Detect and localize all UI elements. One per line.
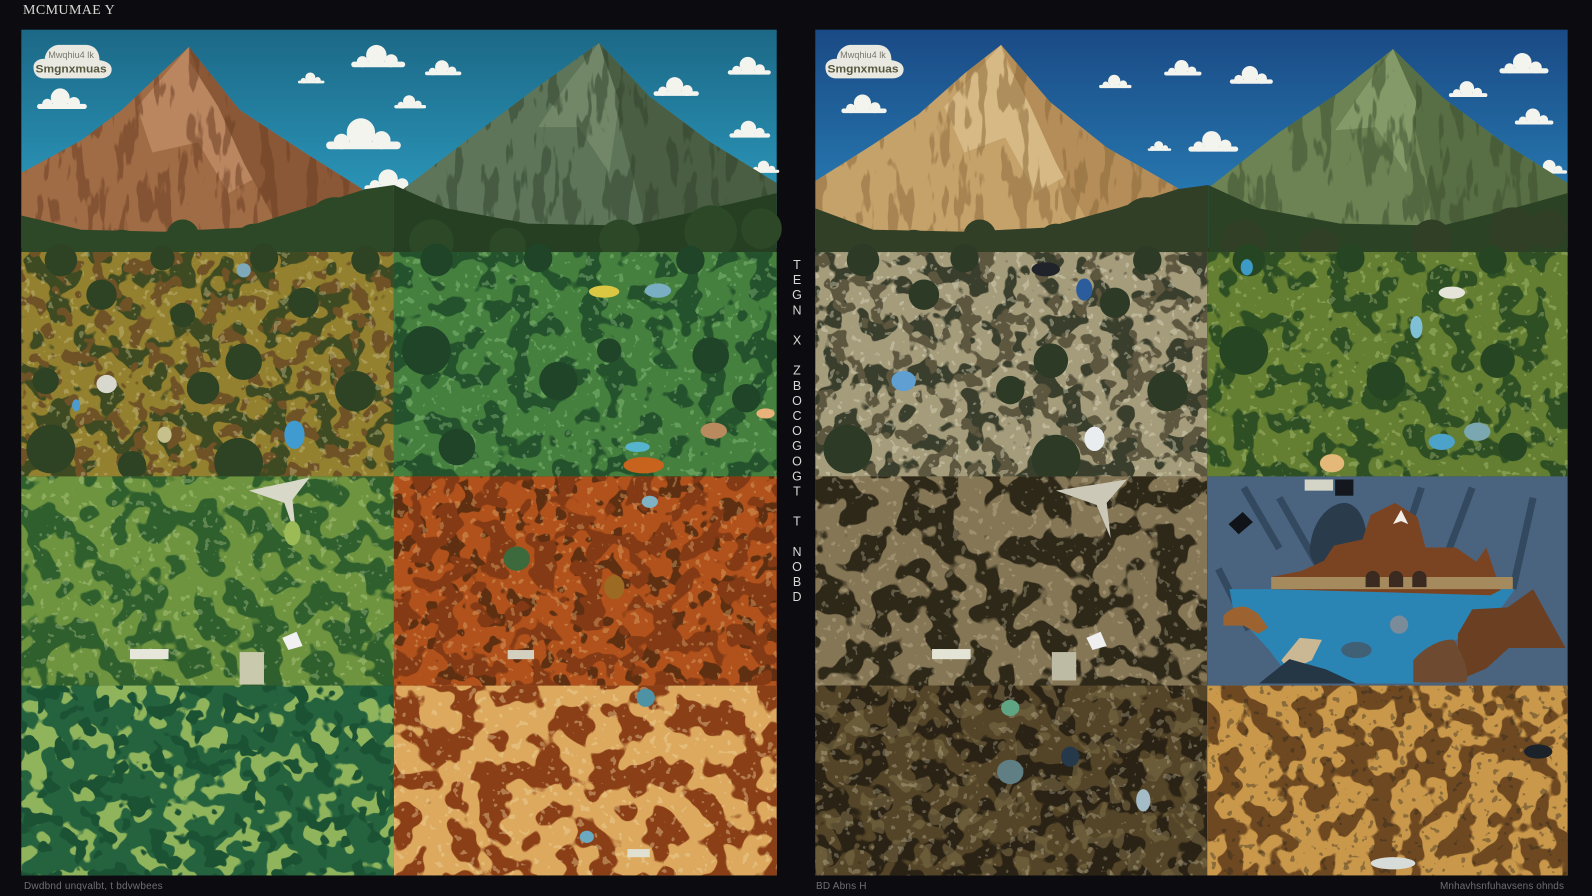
badge: left cloud label: Smgnxmuas <box>36 63 107 75</box>
soil layer: dark umber <box>815 476 1207 686</box>
footer note: left: Dwdbnd unqvalbt, t bdvwbees <box>24 881 163 892</box>
sky: right panel <box>815 30 1568 248</box>
debris: left panel <box>72 263 775 857</box>
scene: flooded ruins <box>1207 476 1568 686</box>
mountain: green peak <box>403 43 777 226</box>
mountain: brown peak <box>21 41 367 239</box>
soil layer: olive field <box>21 244 394 487</box>
clouds: left panel <box>37 45 779 191</box>
panel: left comparison <box>21 30 782 875</box>
footer note: middle: BD Abns H <box>816 881 867 892</box>
footer note: right: Mnhavhsnfuhavsens ohnds <box>1440 881 1564 892</box>
title: MCMUMAE Y <box>23 3 115 18</box>
vertical caption: TEGN X ZBOCOGOGT T NOBD <box>790 258 804 605</box>
forest line: left panel <box>21 185 782 266</box>
mountain: tan peak <box>815 41 1181 239</box>
badge: right cloud label: Mwqhiu4 lk <box>840 50 886 60</box>
soil layer: golden sand <box>1207 686 1568 875</box>
sky: left panel <box>21 30 777 248</box>
soil layer: moss <box>21 476 394 686</box>
soil layer: dark peat <box>815 686 1207 875</box>
forest line: right panel <box>815 185 1568 266</box>
badge: left cloud label: Mwqhiu4 lk <box>48 50 94 60</box>
soil layer: red clay <box>394 476 777 686</box>
soil layer: deep green <box>21 686 394 875</box>
soil layer: green field <box>394 244 777 476</box>
soil layer: olive grass field <box>1207 244 1568 476</box>
soil layer: sandy clay <box>394 686 777 875</box>
badge: right cloud label <box>825 45 904 78</box>
clouds: right panel <box>841 53 1567 174</box>
mountain: olive peak <box>1206 41 1568 244</box>
soil layer: pale dry field <box>815 244 1207 484</box>
badge: left cloud label <box>34 45 112 78</box>
badge: right cloud label: Smgnxmuas <box>827 63 899 75</box>
panel: right comparison <box>815 30 1568 875</box>
debris: right panel <box>891 259 1552 869</box>
